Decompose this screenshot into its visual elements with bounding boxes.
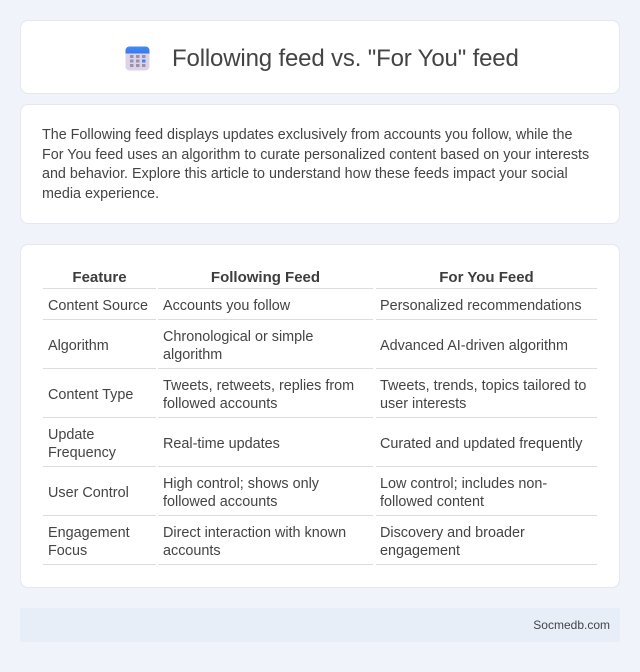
header row [43,269,597,289]
icon: calendar [126,46,150,70]
footer bar [20,608,620,642]
row: content type: Content Type [48,387,133,403]
row: update frequency [43,427,597,467]
header row: For You Feed [439,269,534,286]
row: user control [43,476,597,516]
row: user control: followed accounts [163,494,277,510]
footer text: Socmedb.com [533,618,610,632]
row: engagement focus: Engagement [48,525,130,541]
row: user control: Low control; includes non- [380,476,547,492]
row: update frequency: Update [48,427,94,443]
row: engagement focus: Direct interaction with known [163,525,346,541]
text block: introduction: For You feed uses an algorithm to curate personalized content based on your interests [42,147,589,163]
row: content type [43,378,597,418]
row: content type: Tweets, trends, topics tailored to [380,378,586,394]
row: content source [43,298,597,320]
row: content type: Tweets, retweets, replies from [163,378,354,394]
row: update frequency: Real-time updates [163,436,280,452]
row: algorithm [43,329,597,369]
row: content source: Content Source [48,298,148,314]
header row: Feature [72,269,127,286]
row: algorithm: algorithm [163,347,222,363]
header row: Following Feed [211,269,320,286]
row: user control: High control; shows only [163,476,319,492]
text block: introduction: and behavior. Explore this article to understand how these feeds impact your social [42,166,568,182]
text block: introduction [42,127,589,202]
panel: introduction [20,104,620,224]
row: content type: user interests [380,396,466,412]
text block: introduction: The Following feed displays updates exclusively from accounts you follow, while the [42,127,572,143]
row: user control: followed content [380,494,484,510]
row: content source: Accounts you follow [163,298,290,314]
row: algorithm: Algorithm [48,338,109,354]
row: engagement focus: accounts [163,543,221,559]
row: algorithm: Advanced AI-driven algorithm [380,338,568,354]
title: Following feed vs. "For You" feed [172,45,519,72]
row: content source: Personalized recommendations [380,298,582,314]
panel: comparison table [20,244,620,588]
text block: introduction: media experience. [42,186,159,202]
row: algorithm: Chronological or simple [163,329,313,345]
comparison table [43,269,597,565]
row: engagement focus: engagement [380,543,460,559]
row: update frequency: Curated and updated frequently [380,436,582,452]
row: content type: followed accounts [163,396,277,412]
row: user control: User Control [48,485,129,501]
row: engagement focus: Discovery and broader [380,525,525,541]
row: update frequency: Frequency [48,445,116,461]
row: engagement focus [43,525,597,565]
row: engagement focus: Focus [48,543,87,559]
panel: title card [20,20,620,94]
